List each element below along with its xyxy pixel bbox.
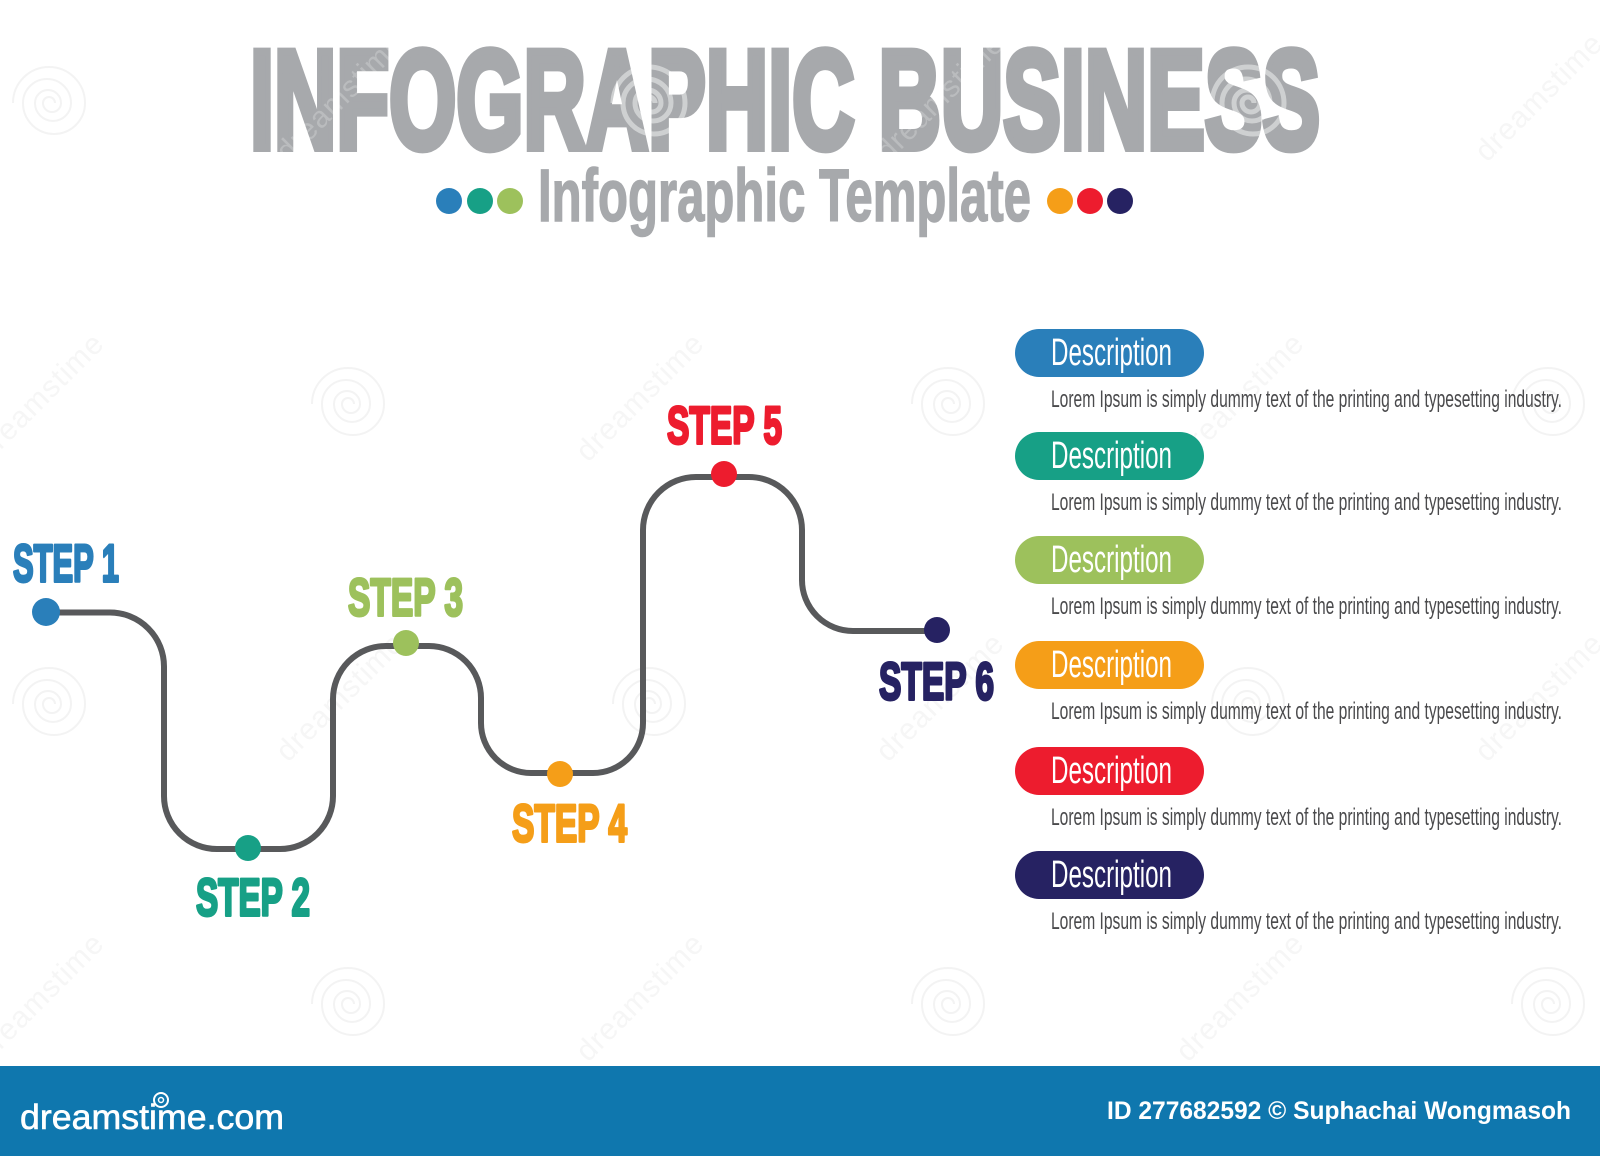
step 5 marker and label — [667, 396, 782, 487]
step 1 marker and label: STEP 1 — [13, 534, 119, 594]
watermark diagonal text: dreamstime — [570, 927, 711, 1068]
decorative dots right of subtitle — [1047, 188, 1133, 214]
description 5: Description — [1051, 750, 1172, 792]
description 4: Description — [1051, 644, 1172, 686]
timeline path — [46, 477, 937, 849]
decorative dots left of subtitle — [436, 188, 523, 214]
watermark over title — [270, 27, 1284, 168]
step 3 marker and label: STEP 3 — [348, 568, 463, 628]
description 2: Description — [1051, 435, 1172, 477]
step 6 marker and label: STEP 6 — [879, 652, 994, 712]
footer bar — [0, 1066, 1600, 1156]
step 2 marker and label: STEP 2 — [196, 868, 310, 928]
step 1 marker and label — [13, 534, 119, 626]
step 4 marker and label — [512, 761, 627, 854]
step 2 marker and label — [196, 835, 310, 928]
description 6: Description — [1051, 854, 1172, 896]
watermark diagonal text: dreamstime — [270, 627, 411, 768]
subtitle: Infographic Template — [538, 154, 1031, 237]
description 4 — [1015, 641, 1562, 725]
watermark diagonal text: dreamstime — [870, 627, 1011, 768]
watermark over title: dreamstime — [270, 27, 411, 168]
footer credit: ID 277682592 © Suphachai Wongmasoh — [1107, 1097, 1571, 1125]
description 1: Description — [1051, 332, 1172, 374]
footer logo: dreamstime.com — [20, 1098, 284, 1137]
description 3 — [1015, 536, 1562, 620]
description 5 — [1015, 747, 1562, 831]
step 3 marker and label — [348, 568, 463, 656]
watermark diagonal text: dreamstime — [570, 327, 711, 468]
description 2 — [1015, 432, 1562, 516]
step 5 marker and label: STEP 5 — [667, 396, 782, 456]
description 1 — [1015, 329, 1562, 413]
step 4 marker and label: STEP 4 — [512, 794, 627, 854]
description 6 — [1015, 851, 1562, 935]
watermark over title: dreamstime — [870, 27, 1011, 168]
watermark diagonal text: dreamstime — [1170, 927, 1311, 1068]
step 6 marker and label — [879, 617, 994, 712]
description 3: Description — [1051, 539, 1172, 581]
watermark diagonal text: dreamstime — [1170, 327, 1311, 468]
